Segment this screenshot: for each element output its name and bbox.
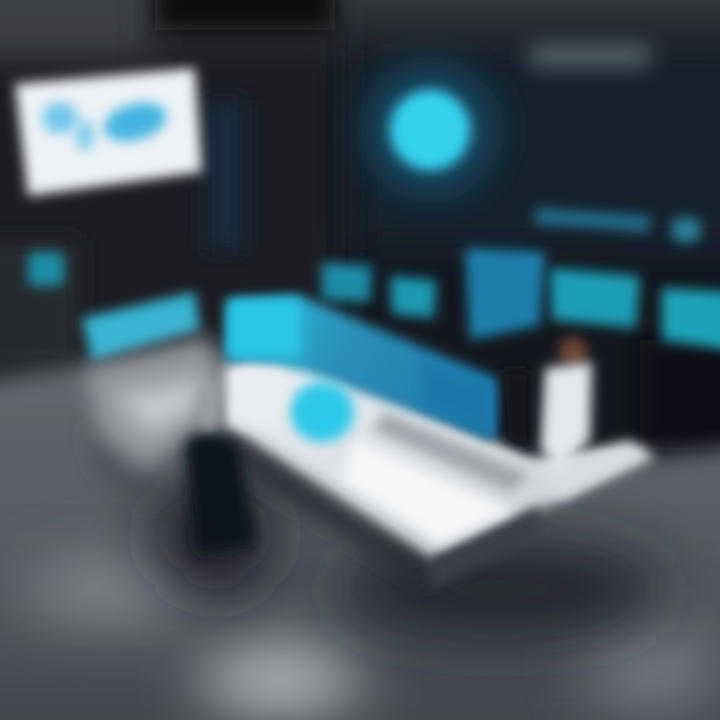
floor	[0, 355, 720, 720]
white card on table	[234, 366, 285, 426]
cyan circle on table	[290, 382, 354, 442]
glowing circle	[368, 68, 492, 192]
wall screen: white display	[15, 68, 202, 196]
wall text blur: heading	[530, 46, 650, 66]
standing person	[500, 337, 592, 470]
left desk	[85, 335, 225, 470]
seated person	[185, 385, 255, 555]
cyan band over table	[226, 296, 500, 440]
left cyan panel	[82, 292, 200, 362]
cyan wall panels	[322, 248, 720, 354]
wall text blur: subtitle	[535, 208, 700, 242]
left chair	[85, 420, 165, 505]
small teal wall icon	[28, 252, 64, 286]
main table	[225, 355, 655, 590]
